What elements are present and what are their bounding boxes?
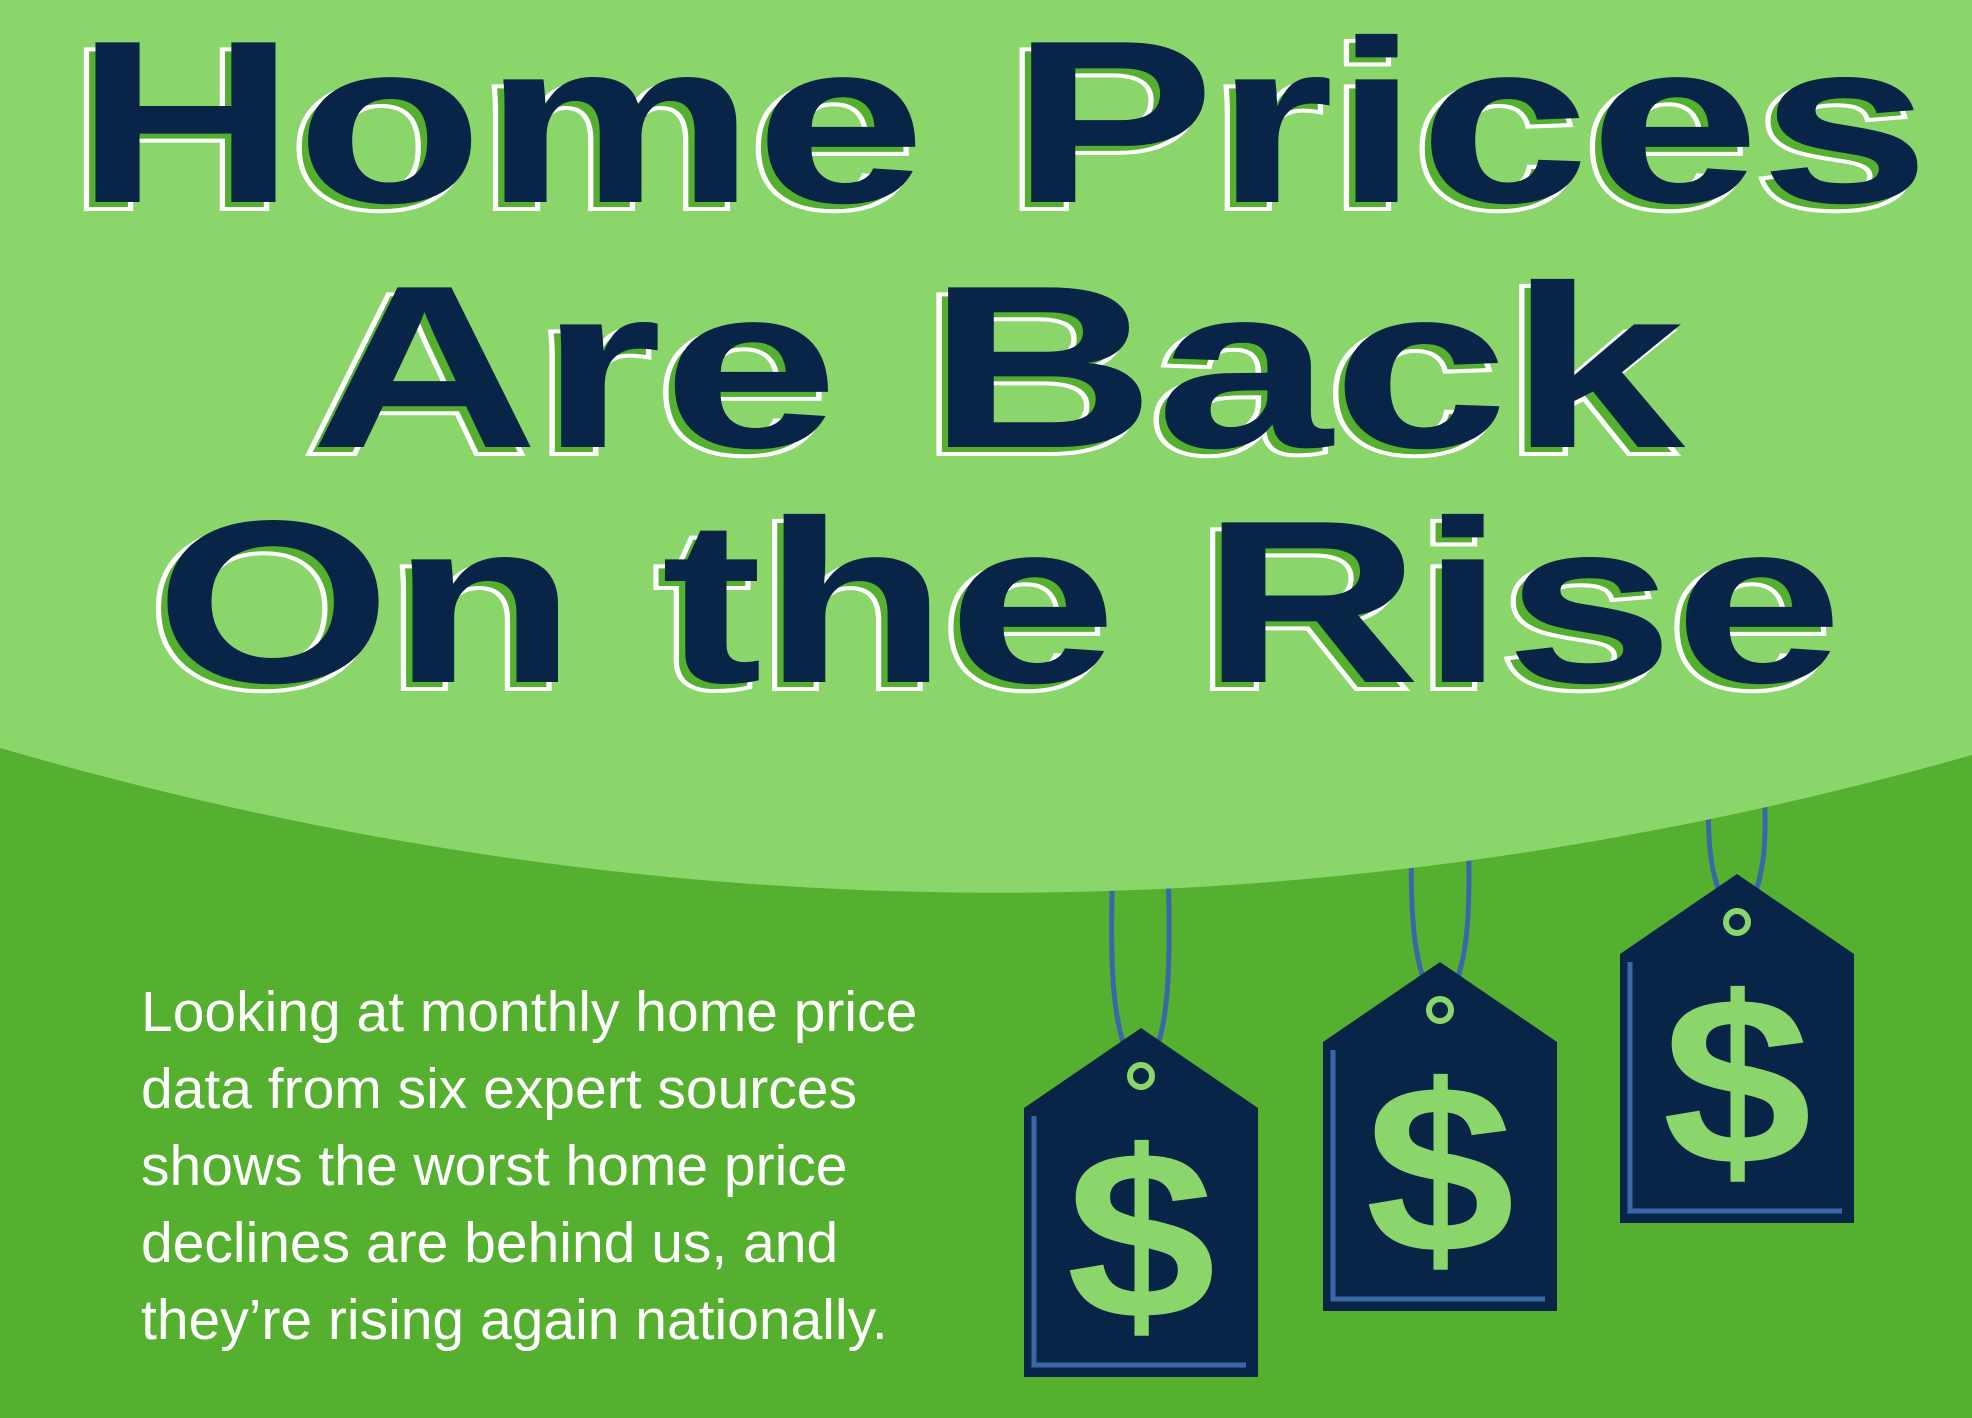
price tag 2	[1323, 962, 1557, 1311]
title: Home Prices	[75, 0, 1930, 252]
intro paragraph: declines are behind us, and	[141, 1211, 838, 1275]
price tag 1	[1024, 1028, 1258, 1377]
title: Are Back	[301, 245, 1677, 504]
intro paragraph: Looking at monthly home price	[141, 980, 917, 1044]
top light green area	[0, 0, 1972, 893]
title: Home Prices	[66, 0, 1921, 259]
title: On the Rise	[146, 480, 1834, 739]
intro paragraph: data from six expert sources	[141, 1057, 857, 1121]
title	[66, 0, 1930, 739]
price tag 2: $	[1365, 1034, 1515, 1303]
tag strings	[1112, 780, 1765, 1076]
price tag 3	[1620, 874, 1854, 1223]
intro paragraph: shows the worst home price	[141, 1134, 847, 1198]
title: On the Rise	[155, 473, 1843, 732]
price tag 1: $	[1066, 1100, 1216, 1369]
intro paragraph	[141, 980, 917, 1352]
price tag 3: $	[1662, 946, 1812, 1215]
title: Are Back	[310, 238, 1686, 497]
intro paragraph: they’re rising again nationally.	[141, 1288, 888, 1352]
